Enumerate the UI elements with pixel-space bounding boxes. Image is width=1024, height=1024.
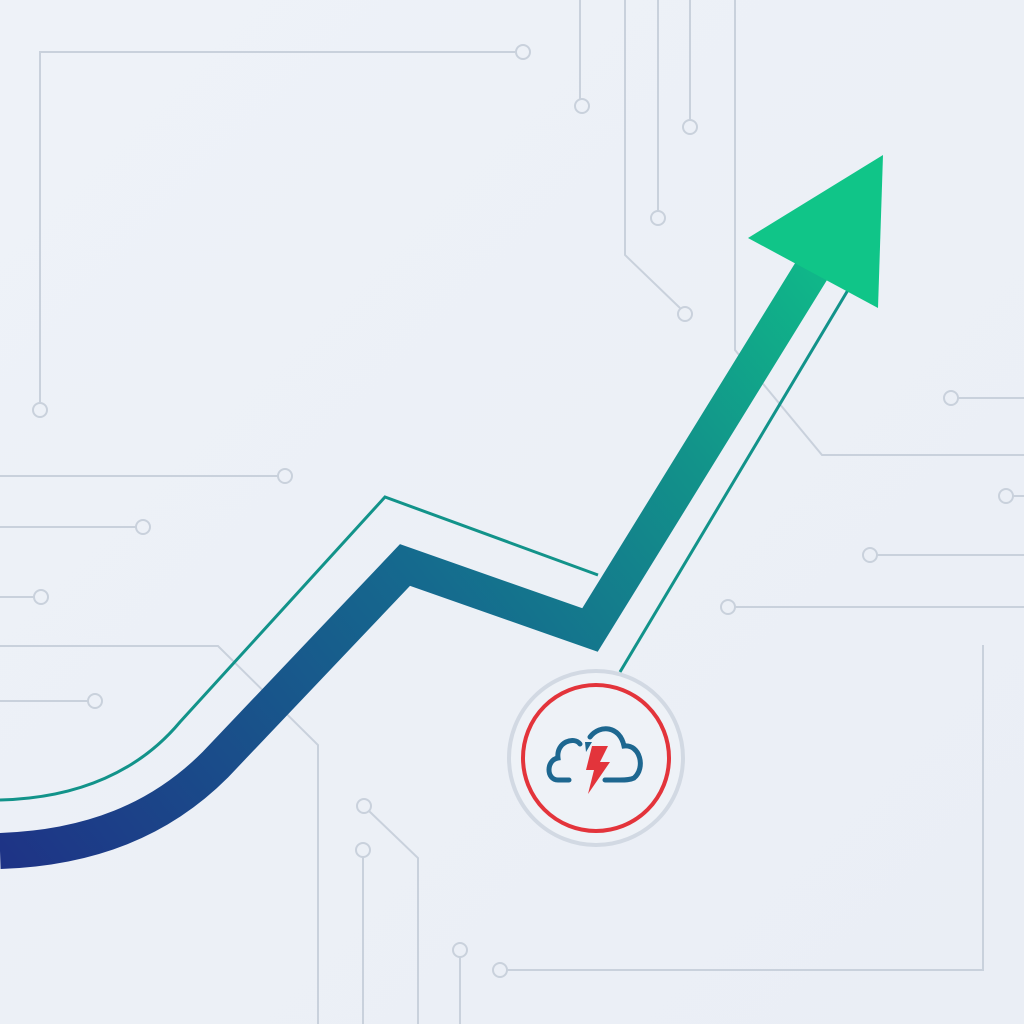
main growth arrow <box>0 155 883 851</box>
thin trend line <box>0 290 848 800</box>
icon: storm cloud badge <box>509 671 683 845</box>
